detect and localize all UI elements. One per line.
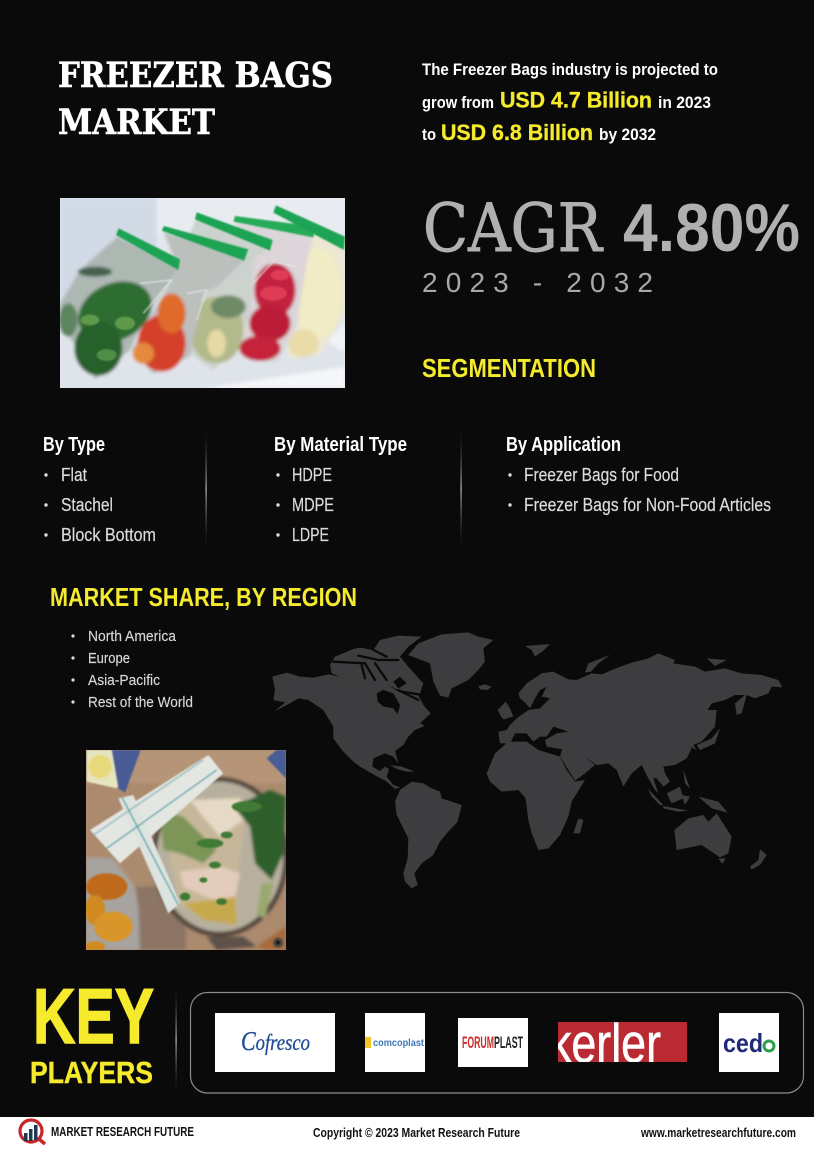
bag 1 green [60,237,180,379]
segment: by type: Stachel [61,495,113,515]
logo: comcoplast [365,1013,425,1072]
logo: kerler [558,1022,687,1062]
market projection text: by 2032 [599,125,656,144]
segment: by material type: HDPE [292,465,332,485]
market projection text: grow from [422,93,494,112]
footer: MARKET RESEARCH FUTURE [51,1125,194,1139]
segment: by material type [274,434,407,545]
footer: Copyright © 2023 Market Research Future [313,1126,520,1140]
segment: by type: Block Bottom [61,525,156,545]
region list [71,628,193,711]
title: FREEZER BAGS [58,56,333,96]
segment: by material type: By Material Type [274,434,407,456]
bag 3 pale green [189,220,266,370]
logo: forumplast [458,1018,528,1067]
logo: cedo: ced [723,1028,763,1058]
logo: forumplast: FORUM [462,1033,494,1052]
region list: Asia-Pacific [88,672,160,689]
segment: by application [506,434,771,515]
key players panel [190,992,804,1093]
logo: cofresco: Cofresco [241,1026,310,1056]
segment: by material type: LDPE [292,525,329,545]
world map [272,632,782,888]
region list: North America [88,628,177,645]
logo: forumplast: PLAST [494,1033,523,1052]
logo: kerler: kerler [549,1012,661,1074]
market projection text: in 2023 [658,93,711,112]
segment: by application: Freezer Bags for Food [524,465,679,485]
bag 5 cream [288,223,345,358]
segment: by type: Flat [61,465,87,485]
photo: fish in freezer bag [85,750,288,952]
key players heading: KEY [33,972,154,1060]
segment: by type: By Type [43,434,105,456]
icon: market research future logo [20,1120,45,1144]
segment: by material type: MDPE [292,495,334,515]
region list: Rest of the World [88,694,193,711]
logo: cofresco [215,1013,335,1072]
market projection text: USD 4.7 Billion [500,88,652,112]
title: MARKET [58,103,215,143]
CAGR figure [423,190,800,267]
logo: cedo [719,1013,779,1072]
key players heading: PLAYERS [30,1055,153,1090]
CAGR years: 2023 - 2032 [422,267,653,298]
segment: by application: Freezer Bags for Non-Food Articles [524,495,771,515]
map: americas and greenland [272,632,493,888]
CAGR figure: 4.80% [623,190,800,266]
logo: comcoplast: comcoplast [373,1037,424,1049]
CAGR figure: CAGR [423,190,604,267]
bag 2 orange [132,232,248,374]
segment: by type [43,434,156,545]
footer [0,1117,814,1150]
segmentation heading: SEGMENTATION [422,353,596,383]
map: eurasia africa and oceania [487,644,782,869]
market projection text: USD 6.8 Billion [441,120,593,145]
market projection text: to [422,125,436,144]
title [58,56,333,143]
key players heading [30,972,154,1090]
segment: by application: By Application [506,434,621,456]
market projection text: The Freezer Bags industry is projected to [422,60,718,79]
region list: Europe [88,650,130,667]
market projection text [422,60,718,145]
market share heading: MARKET SHARE, BY REGION [50,582,357,612]
bag 4 red [235,222,315,363]
photo: freezer bags with vegetables [59,198,345,388]
